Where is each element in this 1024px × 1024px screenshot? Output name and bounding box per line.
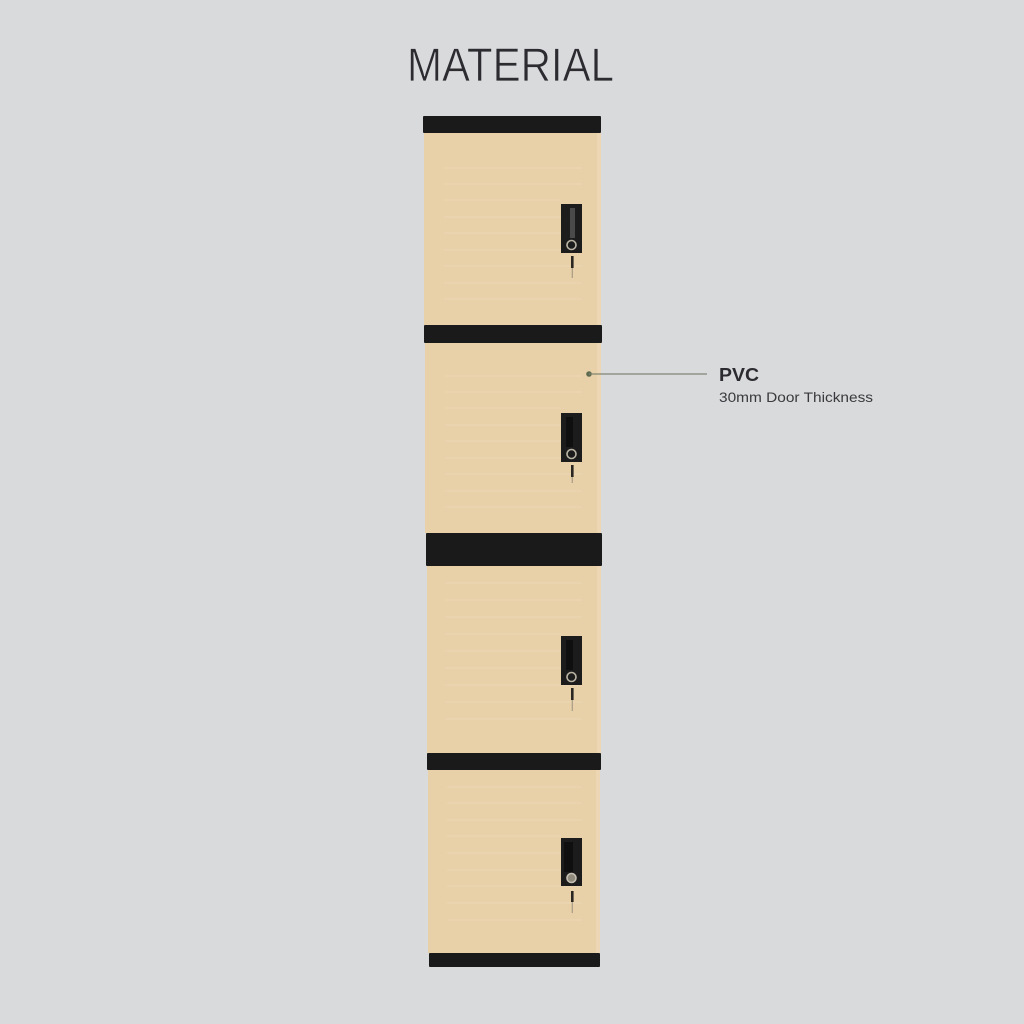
top black bar — [423, 116, 601, 133]
black bar 4 — [427, 753, 601, 770]
bottom black bar — [429, 953, 600, 967]
lock 3 — [561, 636, 582, 711]
door 1 — [424, 133, 601, 325]
black bar 3 — [426, 533, 602, 566]
locker cabinet — [423, 116, 602, 967]
door 2 — [425, 343, 601, 533]
black bar 2 — [424, 325, 602, 343]
callout: PVC label: PVC — [719, 365, 759, 385]
lock 2 — [561, 413, 582, 483]
lock 1 — [561, 204, 582, 278]
lock 4 — [561, 838, 582, 913]
title: MATERIAL — [407, 39, 614, 92]
door 4 — [428, 770, 600, 953]
callout leader line — [586, 371, 707, 377]
door 3 — [427, 566, 601, 753]
callout: door thickness: 30mm Door Thickness — [719, 390, 873, 405]
